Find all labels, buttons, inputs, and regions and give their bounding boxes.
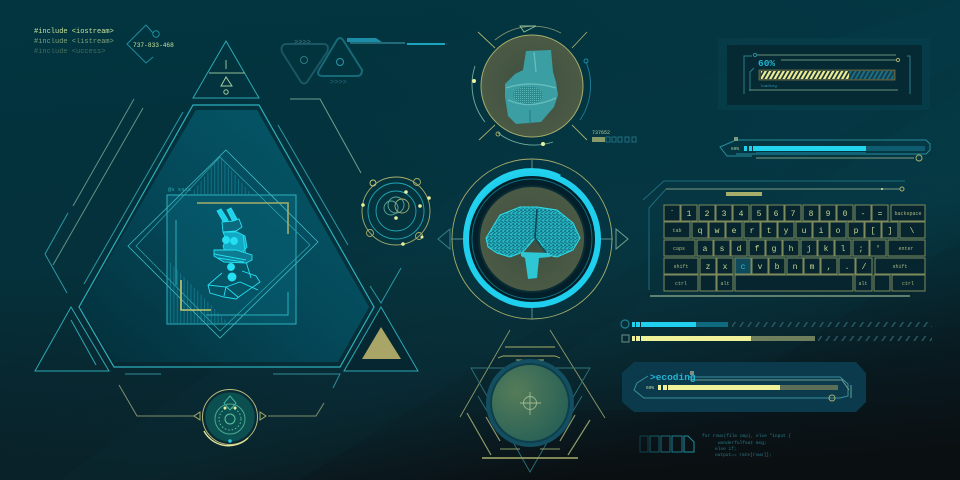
keyboard: [ <box>871 227 875 236</box>
progress panel 60% <box>718 38 930 110</box>
progress panel 60%: loading <box>760 84 777 89</box>
keyboard: o <box>836 227 841 236</box>
keyboard: t <box>767 227 771 236</box>
keyboard: 5 <box>757 210 762 219</box>
hexagon target <box>460 330 605 472</box>
code snippet <box>702 433 791 458</box>
code tag diamond: 737-833-468 <box>133 42 174 49</box>
keyboard: b <box>775 263 780 272</box>
keyboard: alt <box>720 281 730 287</box>
keyboard: ' <box>876 245 880 254</box>
decoding panel: >ecoding <box>650 372 696 383</box>
code snippet: else if; <box>715 446 737 452</box>
keyboard: ctrl <box>675 281 687 287</box>
keyboard: . <box>845 263 849 272</box>
keyboard: d <box>737 245 742 254</box>
keyboard: x <box>723 263 728 272</box>
keyboard: enter <box>898 246 914 252</box>
decoding panel <box>622 362 866 412</box>
keyboard: u <box>802 227 807 236</box>
keyboard: g <box>772 245 777 254</box>
keyboard: e <box>732 227 737 236</box>
trefoil widgets: >>>> <box>330 79 347 87</box>
keyboard: 9 <box>826 210 831 219</box>
keyboard: ] <box>888 227 892 236</box>
code text top left: #include <iostream> <box>34 28 114 36</box>
microscope <box>208 208 260 299</box>
status ticks <box>592 130 636 142</box>
brain scan circle <box>438 159 628 319</box>
keyboard: 3 <box>722 210 727 219</box>
keyboard: ; <box>859 245 863 254</box>
keyboard: 2 <box>705 210 710 219</box>
keyboard: = <box>878 210 883 219</box>
code tag diamond <box>127 25 174 63</box>
keyboard: 6 <box>774 210 779 219</box>
keyboard: alt <box>858 281 868 287</box>
progress bar cyan: 60% <box>731 146 739 152</box>
keyboard: m <box>810 263 815 272</box>
keyboard: j <box>807 245 811 254</box>
keyboard: q <box>698 227 703 236</box>
keyboard: ` <box>670 210 674 219</box>
knee scan circle <box>472 26 591 146</box>
microscope frame <box>128 150 318 338</box>
code text top left <box>34 28 114 56</box>
progress bar cyan <box>720 137 930 161</box>
keyboard: caps <box>673 246 685 252</box>
keyboard: w <box>715 227 720 236</box>
code snippet: for rows(file cmp), else "input { <box>702 433 791 439</box>
yellow progress line <box>622 335 932 342</box>
code snippet: output== rate[rows]]; <box>715 452 772 458</box>
main triangular panel <box>79 105 374 367</box>
keyboard: s <box>720 245 725 254</box>
trefoil widgets: >>>> <box>294 39 311 47</box>
keyboard: a <box>703 245 708 254</box>
keyboard: h <box>789 245 794 254</box>
keyboard: \ <box>910 227 915 236</box>
keyboard: k <box>824 245 829 254</box>
trefoil widgets <box>282 38 362 87</box>
keyboard: 4 <box>739 210 744 219</box>
keyboard: shift <box>892 264 908 270</box>
progress panel 60%: 60% <box>758 58 775 69</box>
keyboard: c <box>741 263 746 272</box>
keyboard: z <box>706 263 711 272</box>
keyboard: 7 <box>791 210 796 219</box>
decorative lines around main panel <box>45 99 401 388</box>
keyboard: f <box>755 245 760 254</box>
keyboard: , <box>827 263 831 272</box>
keyboard: 1 <box>687 210 692 219</box>
keyboard: ctrl <box>902 281 914 287</box>
keyboard: tab <box>672 228 682 234</box>
keyboard: r <box>750 227 755 236</box>
orbit gauge <box>361 177 431 246</box>
keyboard: i <box>819 227 824 236</box>
keyboard: shift <box>673 264 689 270</box>
keyboard <box>643 181 925 296</box>
keyboard: n <box>793 263 798 272</box>
keyboard: l <box>841 245 846 254</box>
bottom compass widget <box>119 385 324 446</box>
cyan progress line <box>621 320 932 328</box>
keyboard: 8 <box>809 210 814 219</box>
code text top left: #include <listream> <box>34 38 114 46</box>
keyboard: 0 <box>843 210 848 219</box>
keyboard: / <box>862 263 867 272</box>
keyboard: p <box>854 227 859 236</box>
code text top left: #include <uccess> <box>34 48 105 56</box>
connector lines <box>347 38 445 44</box>
file icons <box>640 436 694 452</box>
status ticks: 737652 <box>592 130 610 136</box>
left small triangle <box>35 307 109 371</box>
keyboard: y <box>784 227 789 236</box>
right small triangle <box>344 307 418 371</box>
top triangle <box>193 41 259 98</box>
decoding panel: 60% <box>646 385 654 391</box>
keyboard: backspace <box>894 211 922 217</box>
code snippet: wonderfulfeat msg; <box>718 440 767 446</box>
keyboard: - <box>861 210 865 219</box>
keyboard: v <box>758 263 763 272</box>
microscope frame: @s ssss <box>168 186 191 193</box>
